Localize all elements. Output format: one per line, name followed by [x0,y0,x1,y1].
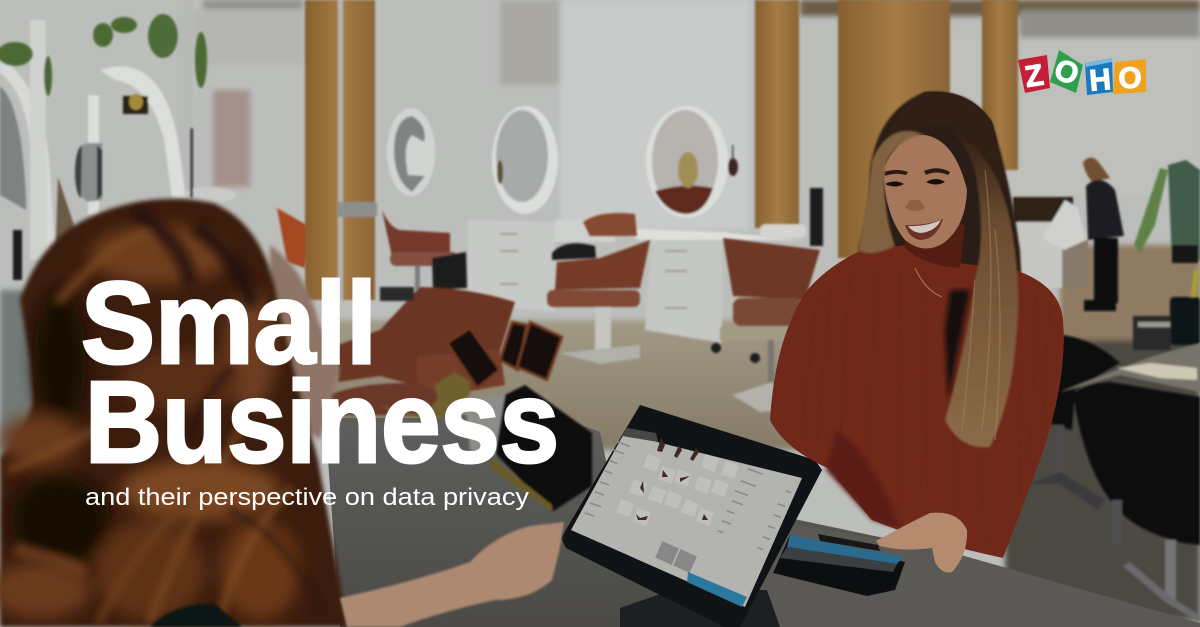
display with brushes and unicorn [380,322,592,512]
action buttons [655,541,697,573]
logo tile O green: O [1050,53,1083,92]
charge button [687,572,747,607]
title: Business [85,357,559,487]
sweater [770,245,1064,558]
white arches and plants [0,0,312,280]
title [81,258,559,487]
subtitle: and their perspective on data privacy [85,484,530,511]
title: Small [81,258,377,388]
tablet screen [571,428,802,607]
wooden pillars [305,0,1018,300]
salon chairs [328,188,823,415]
neck and face [905,215,965,268]
menu and order lines [584,441,792,551]
back woman and shop area [1013,157,1200,350]
woman at right [770,92,1064,573]
counter [325,322,1200,627]
dark top [150,604,242,627]
product tiles [616,454,739,526]
logo tile Z: Z [1023,59,1046,94]
left corner [0,290,40,460]
her hand [876,513,967,573]
mirrors and cabinets [387,106,800,343]
nose [905,200,925,211]
card reader [773,534,905,596]
eyes and brows [884,170,908,176]
arm and hand [340,522,564,627]
logo: Zoho [1018,50,1146,98]
logo tile H: H [1088,63,1112,98]
hair strands [10,215,320,620]
right foreground chairs [1030,335,1200,623]
ear and neck [270,245,340,440]
floor [330,320,850,450]
woman at left with red hair [0,199,564,627]
tablet point of sale [561,405,822,627]
long hair [885,92,1001,200]
smile [905,219,943,240]
hair behind [858,92,1021,450]
red hair [0,199,347,627]
logo tile O orange: O [1118,62,1142,95]
